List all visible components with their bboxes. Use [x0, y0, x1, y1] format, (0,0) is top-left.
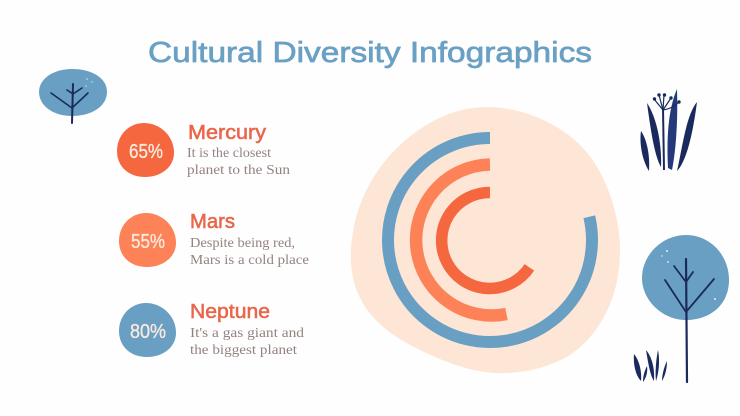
arc: Mars 55% [416, 164, 506, 315]
text: Neptune description [190, 325, 304, 357]
text: Mercury description: It is the closest [187, 145, 271, 160]
text: Neptune description: It's a gas giant and [190, 325, 304, 340]
arc: Neptune 80% [388, 138, 592, 342]
badge: 55% [119, 213, 176, 267]
icon: plant top right [640, 89, 697, 171]
chart background blob [351, 107, 620, 373]
heading: Mars: Mars [190, 211, 235, 233]
heading: Neptune: Neptune [190, 301, 270, 323]
badge: 65%: 65% [129, 141, 163, 163]
text: Mars description: Despite being red, [190, 235, 295, 250]
chart: radial progress [351, 107, 620, 373]
icon: large tree right [642, 235, 729, 382]
arc: Mercury 65% [442, 192, 529, 288]
badge: 55%: 55% [131, 231, 165, 253]
badge: 80%: 80% [130, 321, 166, 343]
text: Neptune description: the biggest planet [190, 342, 297, 357]
panel: Mercury [117, 122, 290, 177]
badge: 65% [117, 123, 174, 177]
text: Mercury description: planet to the Sun [187, 162, 290, 177]
text: Mars description [190, 235, 309, 267]
text: Mercury description [187, 145, 290, 177]
badge: 80% [119, 303, 176, 357]
panel: Neptune [119, 301, 304, 357]
icon: small tree top left [39, 69, 107, 123]
icon: small grass [634, 350, 667, 382]
text: Mars description: Mars is a cold place [190, 252, 309, 267]
heading: Mercury: Mercury [188, 122, 266, 144]
title: Cultural Diversity Infographics [148, 37, 592, 69]
panel: Mars [119, 211, 309, 267]
